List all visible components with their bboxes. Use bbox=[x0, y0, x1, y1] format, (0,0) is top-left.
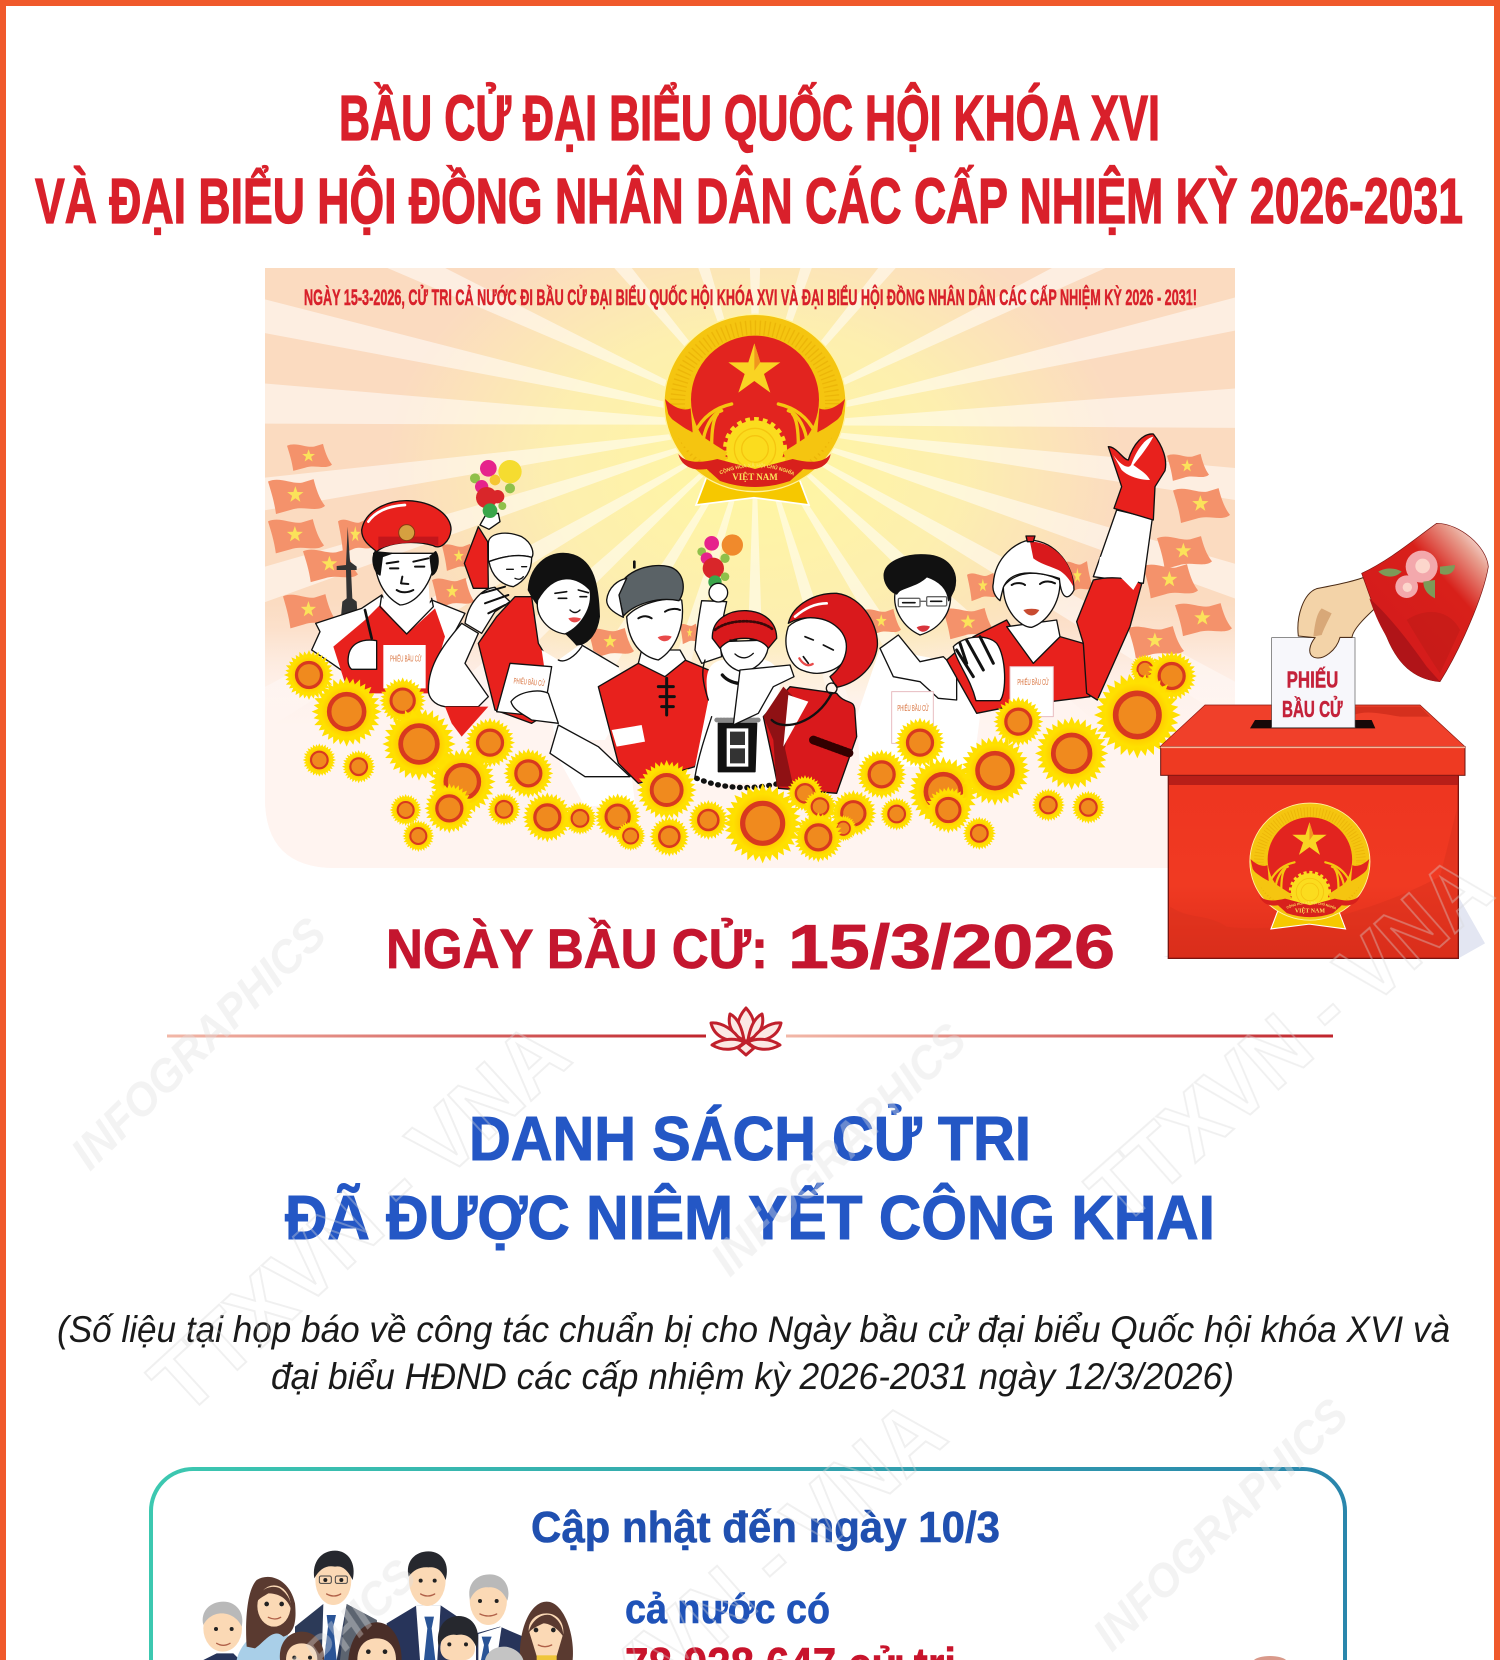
icon: bouquet right bbox=[697, 534, 743, 589]
box body bbox=[1168, 776, 1458, 958]
title bbox=[35, 81, 1463, 237]
watermarks: TTXVN - VNA bbox=[131, 1002, 587, 1432]
watermarks: INFOGRAPHICS bbox=[61, 907, 336, 1179]
ballot paper: PHIẾU bbox=[1287, 667, 1338, 693]
box lid bbox=[1160, 705, 1465, 775]
source note: (Số liệu tại họp báo về công tác chuẩn bị cho Ngày bầu cử đại biểu Quốc hội khóa XVI và bbox=[57, 1309, 1450, 1350]
ballot paper: BẦU CỬ bbox=[1282, 696, 1343, 722]
figure: young man with glasses: PHIẾU BẦU CỬ bbox=[897, 703, 929, 713]
national emblem: VIỆT NAM bbox=[732, 472, 778, 482]
icon: corner figure bbox=[1254, 1656, 1286, 1660]
election date: 15/3/2026 bbox=[788, 913, 1115, 982]
voter count text bbox=[625, 1585, 956, 1660]
voter group illustration bbox=[203, 1551, 573, 1660]
source note: đại biểu HĐND các cấp nhiệm kỳ 2026-2031 ngày 12/3/2026) bbox=[271, 1356, 1234, 1397]
box emblem: CỘNG HÒA XÃ HỘI CHỦ NGHĨA bbox=[1286, 900, 1336, 910]
figure: soldier bbox=[312, 501, 465, 693]
section heading: DANH SÁCH CỬ TRI bbox=[469, 1105, 1031, 1174]
ballot box with hand bbox=[1160, 523, 1488, 959]
hand bbox=[1297, 577, 1374, 658]
figure: little girl with bouquet bbox=[692, 582, 780, 790]
panel heading: Cập nhật đến ngày 10/3 bbox=[531, 1503, 1000, 1552]
icon: lotus bbox=[711, 1008, 781, 1055]
figure: soldier: PHIẾU BẦU CỬ bbox=[390, 654, 422, 664]
lotus divider bbox=[167, 1008, 1333, 1055]
watermarks bbox=[61, 837, 1500, 1660]
poster banner bbox=[179, 268, 1469, 1566]
national emblem bbox=[663, 314, 847, 506]
figure: worker with raised arm: PHIẾU BẦU CỬ bbox=[1017, 677, 1049, 687]
figure: mother and child: PHIẾU BẦU CỬ bbox=[513, 675, 546, 688]
section heading: ĐÃ ĐƯỢC NIÊM YẾT CÔNG KHAI bbox=[285, 1184, 1215, 1253]
figure: woman with red headdress bbox=[733, 593, 877, 793]
figure: mother and child bbox=[428, 513, 635, 807]
box emblem: VIỆT NAM bbox=[1295, 906, 1325, 914]
sunflowers bbox=[281, 647, 1200, 868]
sleeve bbox=[1362, 523, 1488, 682]
voter count text: cả nước có bbox=[625, 1585, 830, 1632]
ballot paper bbox=[1272, 638, 1355, 728]
figure: worker with raised arm bbox=[947, 434, 1166, 717]
source note bbox=[57, 1309, 1450, 1397]
flags bbox=[268, 444, 1232, 658]
watermarks: INFOGRAPHICS bbox=[701, 1013, 976, 1285]
box emblem bbox=[1249, 802, 1370, 930]
section heading bbox=[285, 1105, 1215, 1253]
figure: man with hat bbox=[598, 562, 717, 783]
icon: bouquet left bbox=[470, 460, 522, 518]
panel: voter statistics bbox=[151, 1469, 1345, 1660]
election date bbox=[389, 918, 1113, 970]
people illustration bbox=[312, 434, 1166, 807]
election date: NGÀY BẦU CỬ: bbox=[386, 917, 768, 980]
figure: young man with glasses bbox=[857, 555, 980, 767]
watermarks: INFOGRAPHICS bbox=[1083, 1388, 1358, 1660]
national emblem: CỘNG HÒA XÃ HỘI CHỦ NGHĨA bbox=[720, 462, 794, 476]
